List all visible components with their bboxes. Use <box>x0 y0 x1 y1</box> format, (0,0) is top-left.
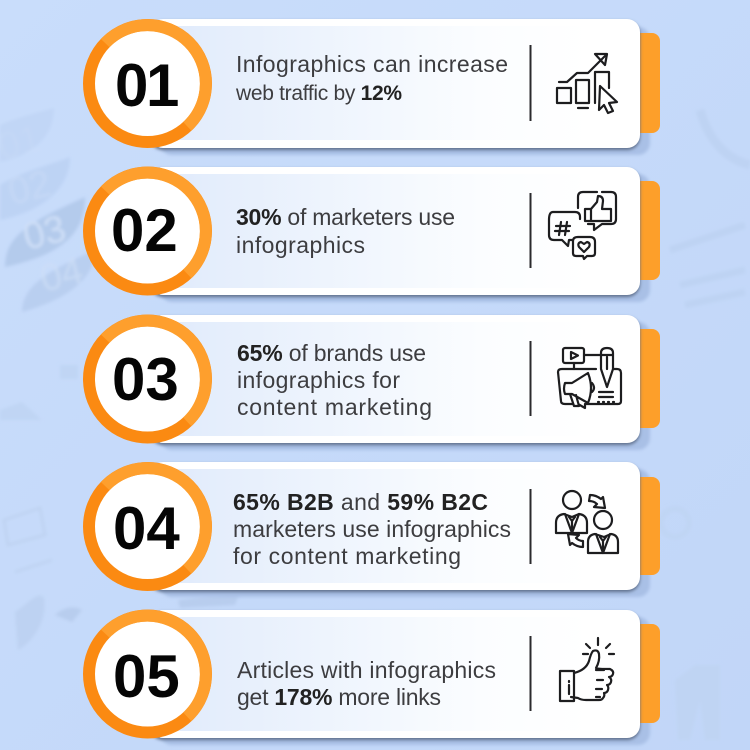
text: infographics for <box>237 367 400 393</box>
ring <box>89 25 206 142</box>
orange tab <box>620 477 660 575</box>
faded background pattern: 02 <box>4 163 55 214</box>
ring <box>89 616 206 732</box>
number: 04 <box>113 495 180 562</box>
text: Articles with infographics <box>237 657 496 683</box>
text: 65% of brands use <box>237 340 426 366</box>
text: 30% of marketers use <box>236 204 455 230</box>
divider <box>530 489 532 564</box>
icon: thumbs up <box>560 638 614 701</box>
icon: content marketing megaphone <box>558 348 621 408</box>
panel: stat 02 <box>89 167 660 302</box>
number: 02 <box>111 197 178 264</box>
icon: social bubbles <box>549 192 616 259</box>
text: content marketing <box>237 394 432 420</box>
orange tab <box>620 329 660 428</box>
faded background pattern: 03 <box>19 208 70 259</box>
text: web traffic by 12% <box>236 82 402 105</box>
divider <box>530 45 532 121</box>
text: for content marketing <box>233 543 461 569</box>
divider <box>530 193 532 268</box>
divider <box>530 341 532 416</box>
number: 03 <box>112 346 179 413</box>
panel: stat 05 <box>89 610 660 745</box>
text: infographics <box>236 232 365 258</box>
text: Infographics can increase <box>236 51 508 77</box>
ring <box>89 468 206 585</box>
icon: growth chart with cursor <box>557 54 617 113</box>
orange tab <box>620 181 660 280</box>
number: 01 <box>115 52 179 119</box>
panel: stat 03 <box>89 315 660 450</box>
text: get 178% more links <box>237 684 441 710</box>
divider <box>530 636 532 711</box>
ring <box>89 320 206 438</box>
text: 65% B2B and 59% B2C <box>233 489 488 515</box>
panel: stat 01 <box>89 19 660 155</box>
icon: two businesspeople exchanging <box>556 491 618 553</box>
orange tab <box>620 33 660 133</box>
faded background pattern: 04 <box>36 250 87 301</box>
number: 05 <box>113 643 180 710</box>
ring <box>89 172 206 290</box>
orange tab <box>620 624 660 723</box>
panel: stat 04 <box>89 462 660 597</box>
text: marketers use infographics <box>233 516 511 542</box>
